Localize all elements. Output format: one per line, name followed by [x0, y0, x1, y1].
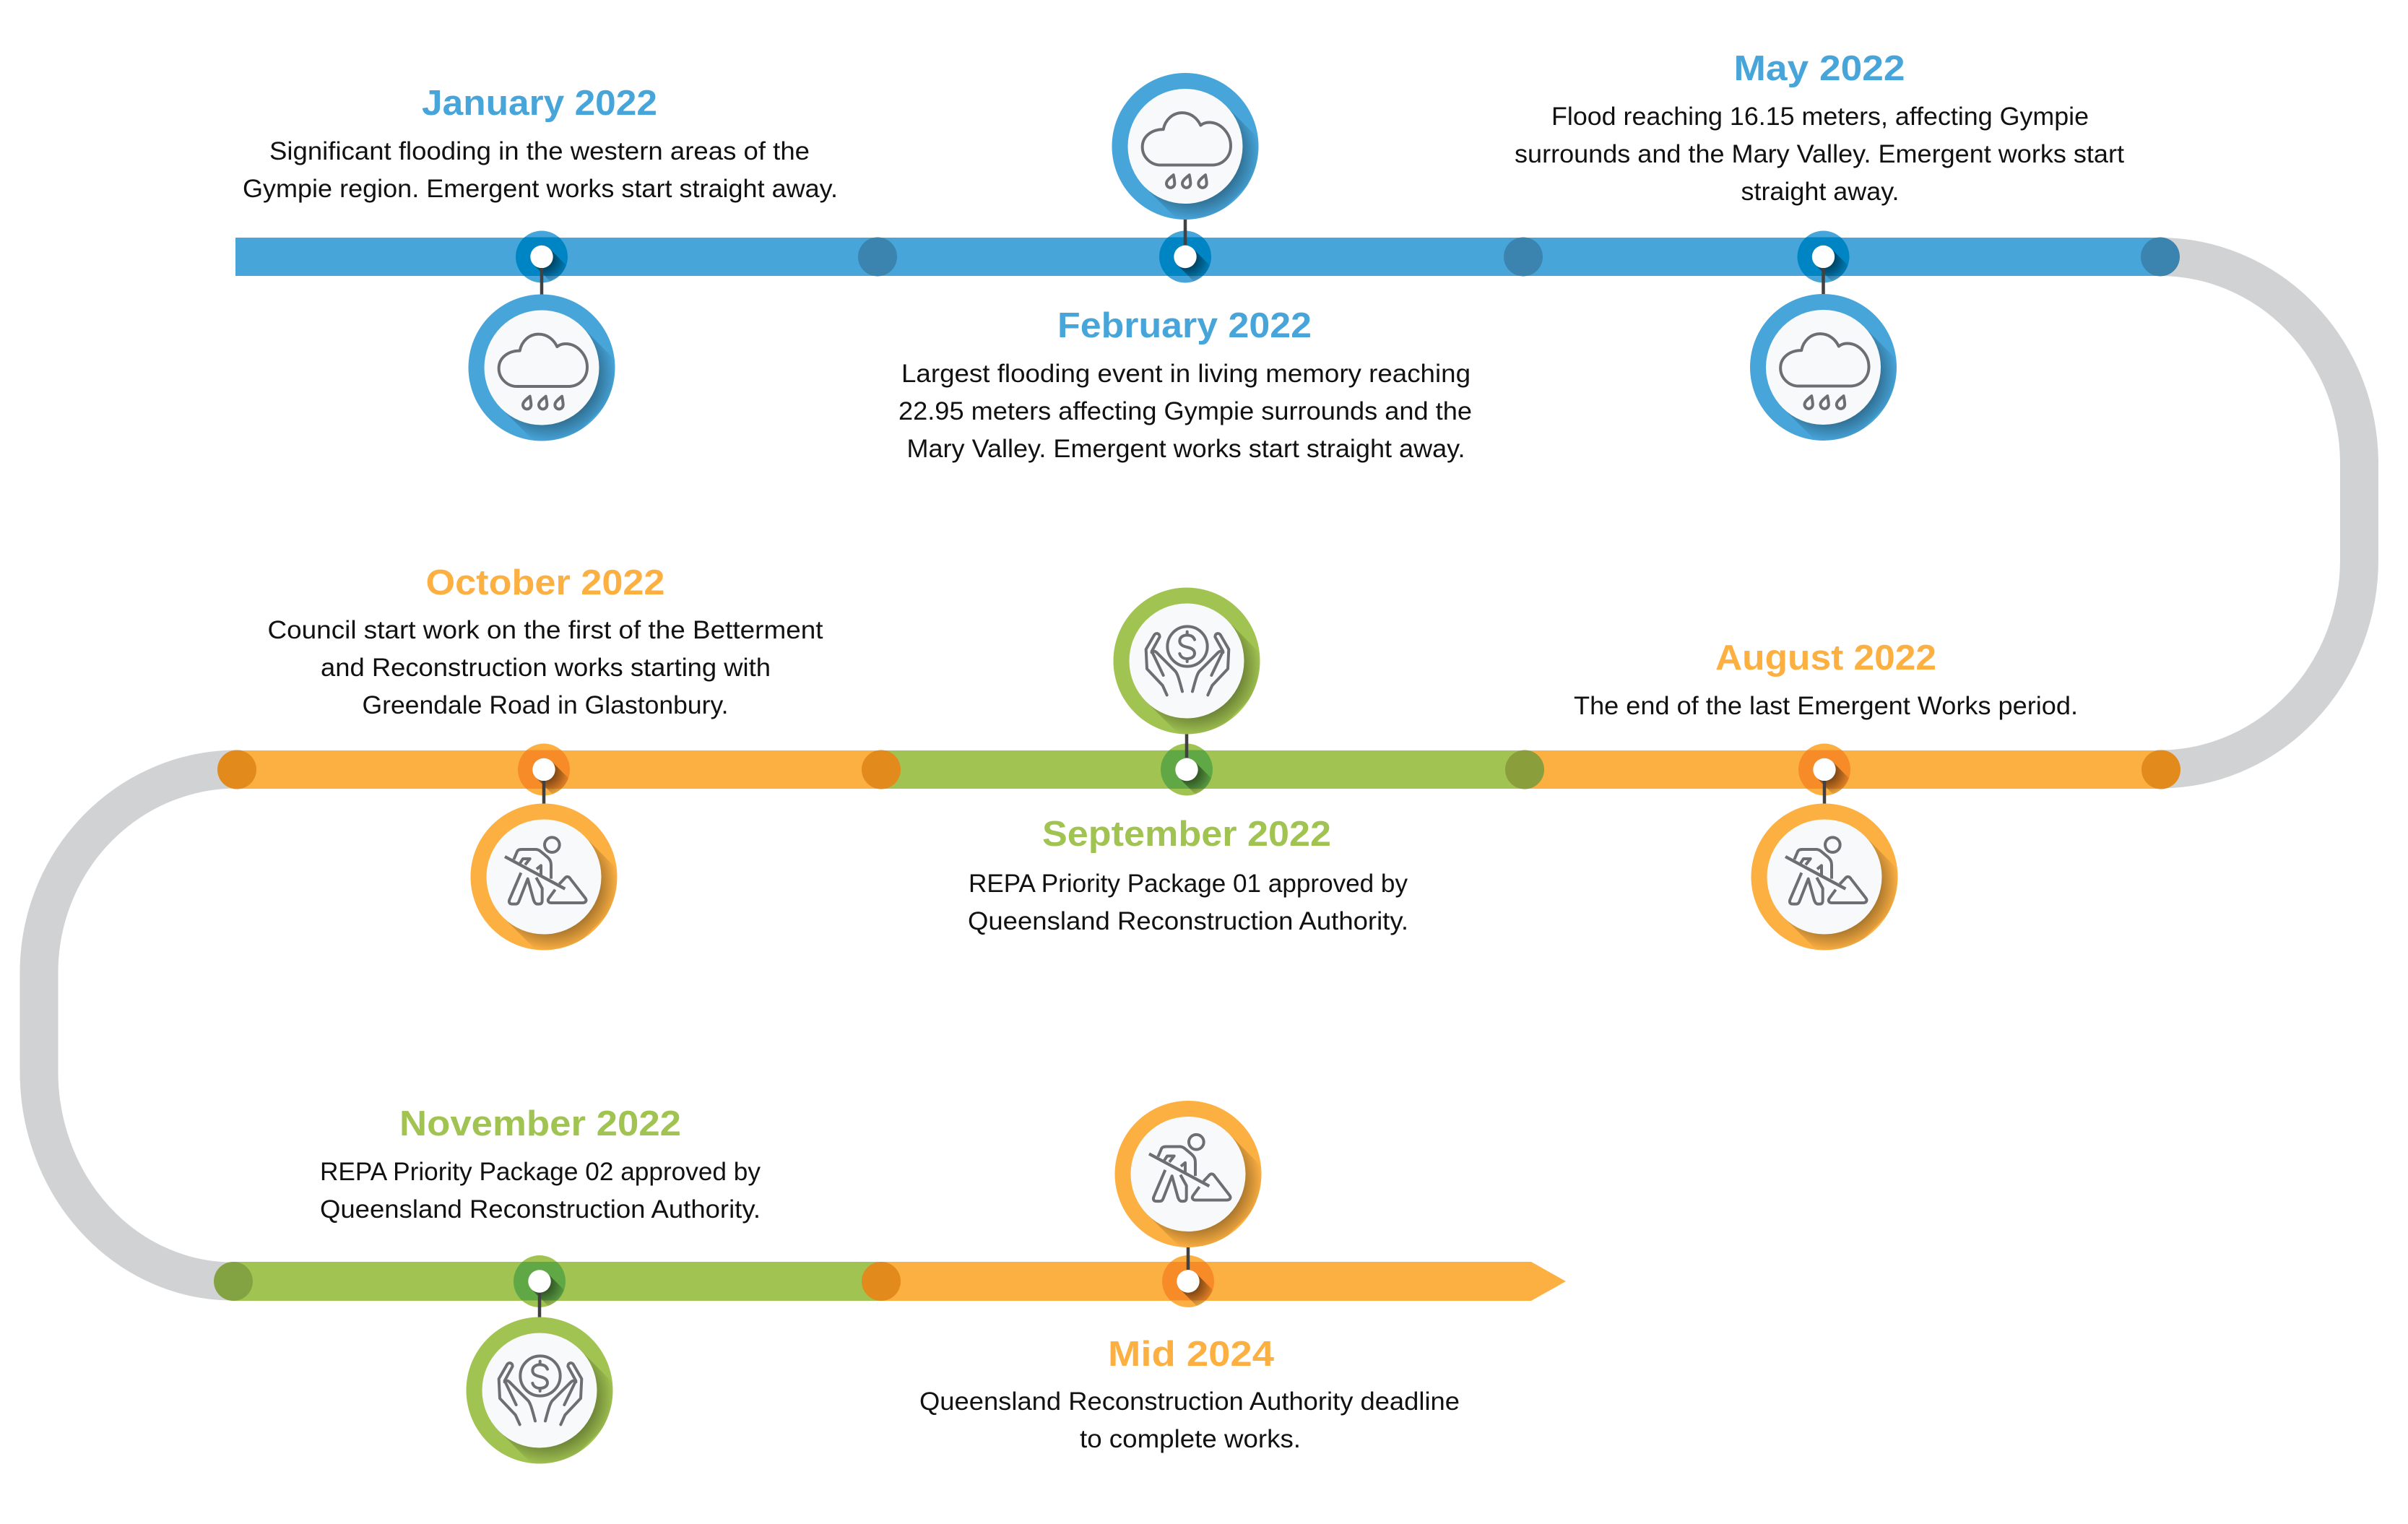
heading: October 2022 [426, 563, 664, 602]
heading: September 2022 [1042, 815, 1331, 854]
marker [514, 1255, 566, 1307]
text block: Flood reaching 16.15 meters, affecting Gympie [1551, 103, 2089, 131]
heading: February 2022 [1057, 306, 1312, 345]
heading: January 2022 [422, 84, 657, 123]
heading: November 2022 [399, 1104, 681, 1143]
text block: to complete works. [1080, 1425, 1301, 1453]
timeline row 2 bar [217, 750, 2180, 789]
marker [1162, 1255, 1214, 1307]
icon: rain cloud [1112, 73, 1276, 237]
text block [243, 137, 838, 203]
icon: hands holding money [467, 1317, 631, 1481]
heading: Mid 2024 [1108, 1335, 1274, 1374]
heading: May 2022 [1733, 49, 1905, 88]
text block: Queensland Reconstruction Authority. [320, 1195, 761, 1224]
text block: Queensland Reconstruction Authority deadline [919, 1387, 1460, 1416]
timeline row 1 bar [235, 237, 2180, 276]
text block: Queensland Reconstruction Authority. [968, 907, 1408, 935]
icon: rain cloud [468, 295, 633, 459]
event: May 2022 [1515, 49, 2124, 458]
text block: Gympie region. Emergent works start straight away. [243, 175, 838, 203]
text block [320, 1158, 761, 1224]
event: January 2022 [243, 84, 838, 459]
icon: worker with shovel [471, 803, 635, 968]
text block: Significant flooding in the western areas of the [269, 137, 810, 165]
timeline row 3 bar with arrow [214, 1262, 1566, 1301]
text block: Largest flooding event in living memory reaching [901, 360, 1471, 388]
text block: and Reconstruction works starting with [321, 654, 771, 682]
icon: hands holding money [1114, 588, 1278, 752]
heading: August 2022 [1715, 638, 1936, 677]
text block [919, 1387, 1460, 1453]
marker [1797, 231, 1849, 283]
event: August 2022 [1574, 638, 2078, 968]
marker [1161, 744, 1213, 796]
icon: worker with shovel [1751, 803, 1915, 968]
text block: REPA Priority Package 01 approved by [969, 870, 1408, 898]
marker [1798, 744, 1850, 796]
icon: rain cloud [1750, 294, 1914, 458]
event: February 2022 [898, 73, 1472, 463]
text block: Greendale Road in Glastonbury. [363, 691, 728, 719]
icon: worker with shovel [1115, 1101, 1279, 1265]
text block [898, 360, 1472, 463]
text block [267, 616, 823, 719]
event: November 2022 [320, 1104, 761, 1481]
text block [968, 870, 1408, 935]
text block: surrounds and the Mary Valley. Emergent works start [1515, 140, 2124, 168]
marker [1159, 231, 1211, 283]
text block: straight away. [1741, 178, 1900, 206]
text block: REPA Priority Package 02 approved by [320, 1158, 761, 1186]
marker [518, 744, 570, 796]
event: September 2022 [968, 588, 1408, 935]
event: October 2022 [267, 563, 823, 968]
event: Mid 2024 [919, 1101, 1460, 1453]
text block: 22.95 meters affecting Gympie surrounds and the [898, 397, 1472, 425]
text block: Council start work on the first of the Betterment [267, 616, 823, 644]
marker [516, 231, 568, 283]
text block [1515, 103, 2124, 206]
text block: The end of the last Emergent Works period. [1574, 692, 2078, 720]
text block: Mary Valley. Emergent works start straight away. [907, 435, 1465, 463]
grey connector curve left [39, 769, 242, 1281]
grey connector curve right [2156, 257, 2359, 769]
